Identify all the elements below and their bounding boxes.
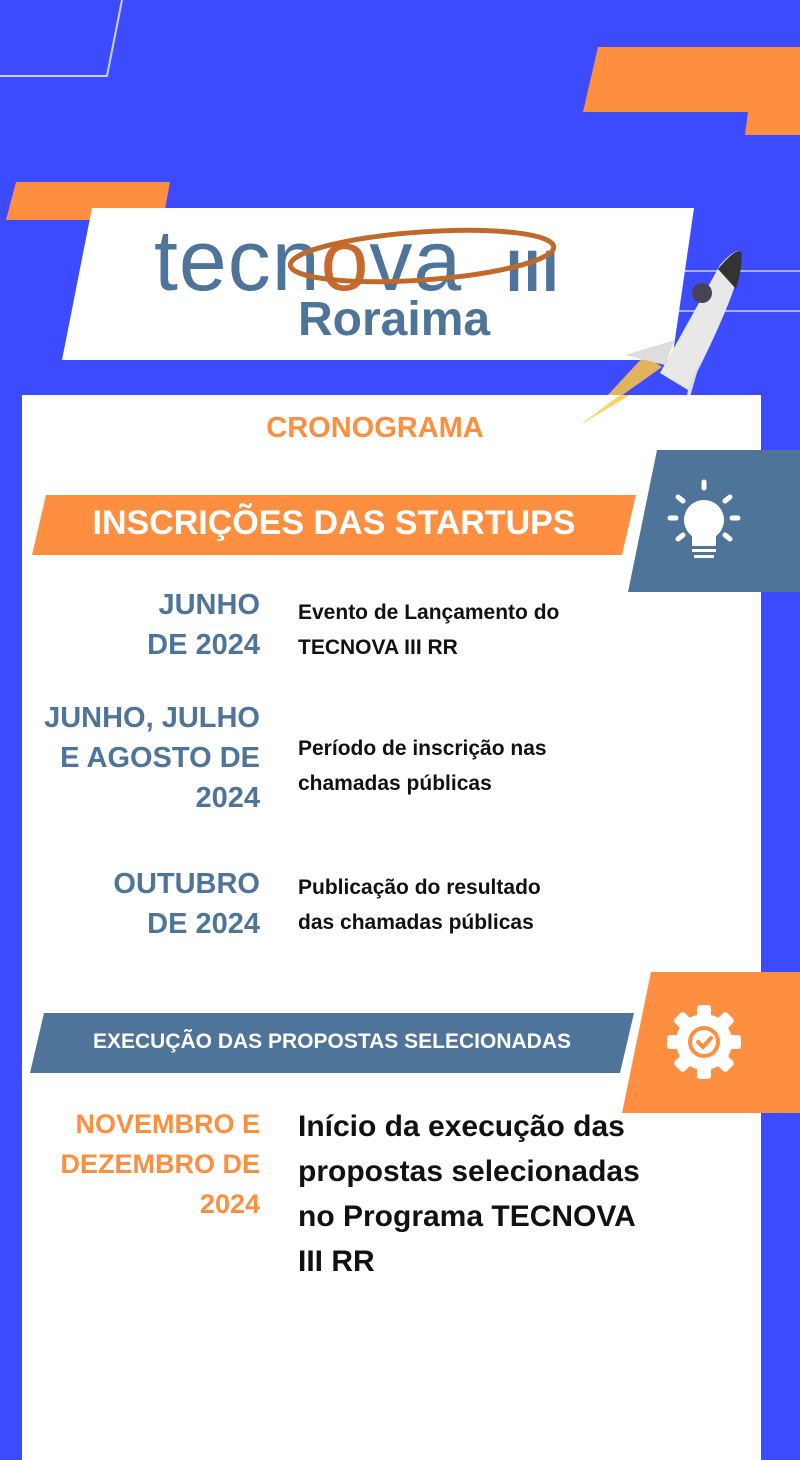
icon: rocket [608,250,742,395]
logo panel [62,208,694,360]
row 2 [44,702,260,814]
text: Início da execução das [298,1110,625,1143]
heading: cronograma: CRONOGRAMA [266,412,484,444]
row 3: DE 2024 [147,908,260,940]
row 2: JUNHO, JULHO [44,702,260,734]
row 2: E AGOSTO DE [60,742,260,774]
text: chamadas públicas [298,772,492,795]
banner: execução [30,1013,634,1073]
icon: rocket flame overlay [580,395,630,425]
text: III RR [298,1245,375,1278]
subtitle Roraima: Roraima [298,293,490,346]
decorative shapes [0,0,800,312]
text: Publicação do resultado [298,876,541,899]
banner: execução: EXECUÇÃO DAS PROPOSTAS SELECIONADAS [93,1030,571,1053]
row 3: OUTUBRO [113,868,260,900]
white main panel [22,395,761,1460]
row 1: JUNHO [158,589,260,621]
row 1 [147,589,260,661]
row 4: NOVEMBRO E [75,1109,260,1139]
row 3 [113,868,260,940]
icon panel: lightbulb [628,450,800,592]
row 1: DE 2024 [147,629,260,661]
row 4: 2024 [200,1189,260,1219]
text: propostas selecionadas [298,1155,640,1188]
row 2: 2024 [195,782,260,814]
icon panel: gear [622,972,800,1113]
text: TECNOVA III RR [298,636,458,659]
text: Evento de Lançamento do [298,601,559,624]
row 4: DEZEMBRO DE [60,1149,260,1179]
row 4 [60,1109,260,1219]
logo III: III [506,239,560,304]
text: no Programa TECNOVA [298,1200,636,1233]
logo text: tecnova [154,213,462,309]
banner: inscrições [32,495,636,555]
text: Período de inscrição nas [298,737,547,760]
banner: inscrições: INSCRIÇÕES DAS STARTUPS [92,504,575,542]
text: das chamadas públicas [298,911,534,934]
